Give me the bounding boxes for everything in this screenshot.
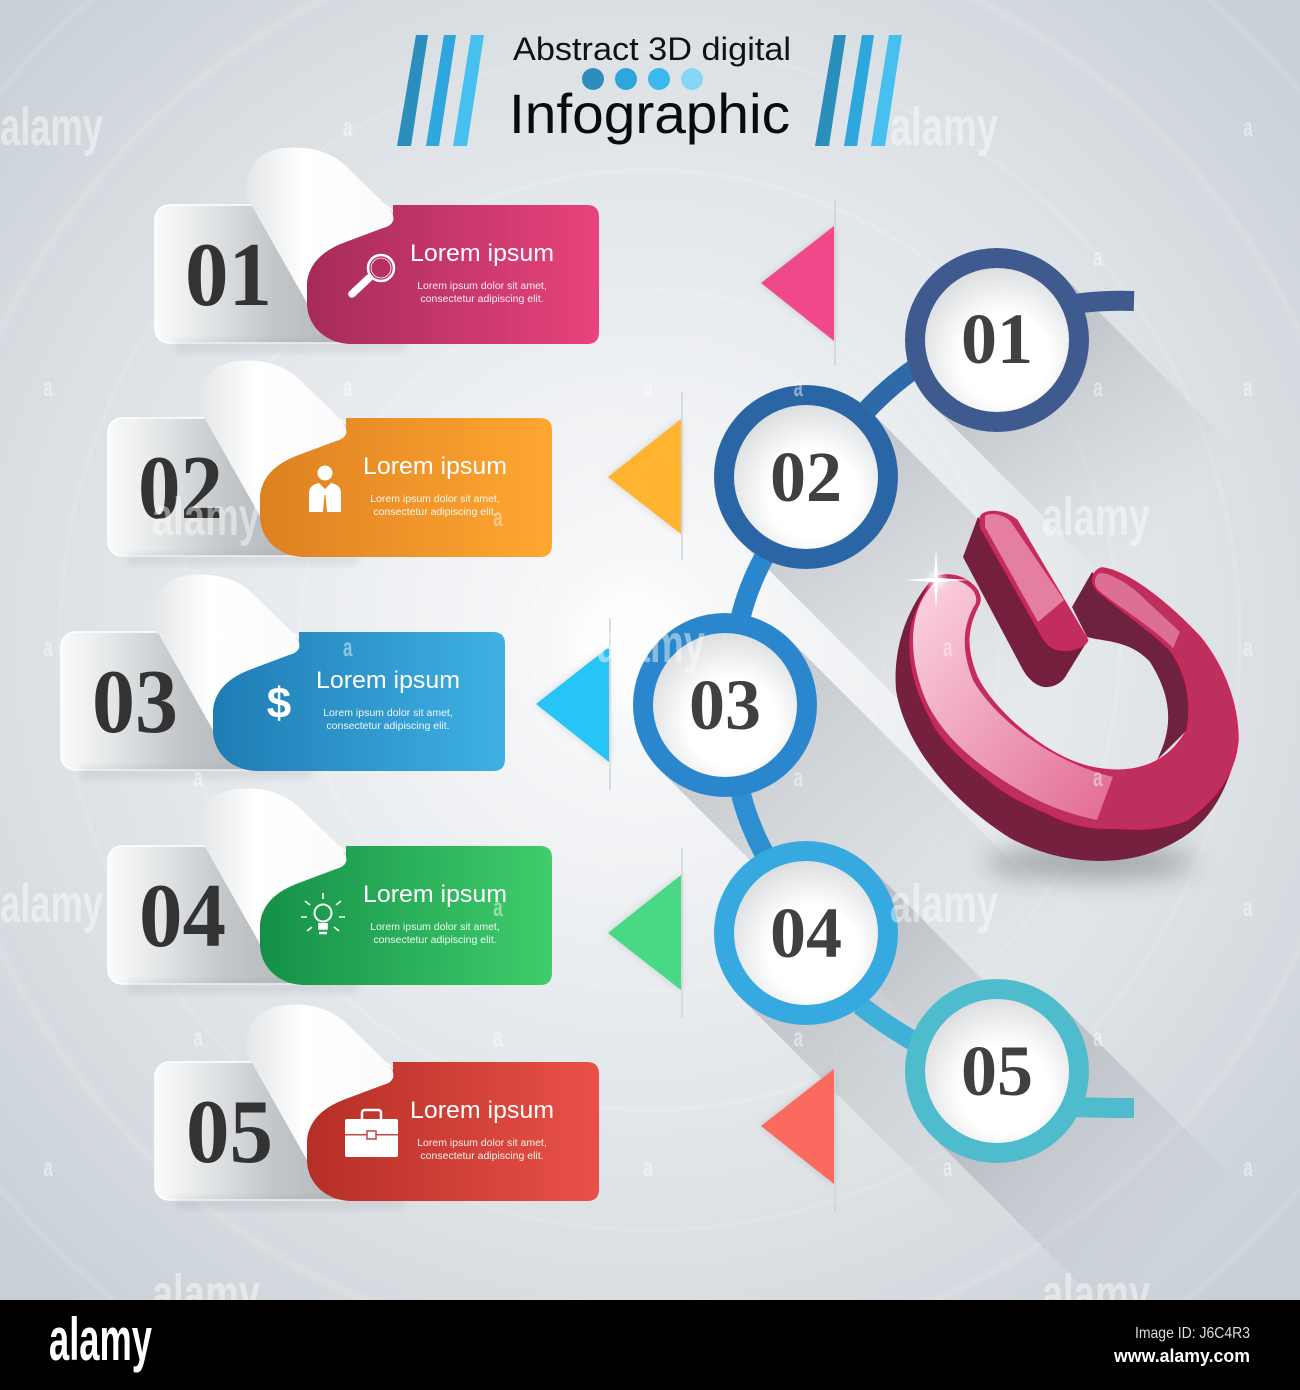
circle 02	[714, 385, 898, 569]
panel: card 01: Lorem ipsum dolor sit amet,	[417, 280, 547, 292]
panel: card 01: Lorem ipsum	[410, 240, 554, 267]
icon: light bulb	[301, 893, 345, 933]
footer bar	[0, 1300, 1300, 1390]
panel: card 02: Lorem ipsum	[363, 453, 507, 480]
watermarks: alamy	[890, 874, 998, 934]
panel: card 02: consectetur adipiscing elit.	[373, 506, 497, 518]
watermarks: a	[643, 372, 653, 402]
panel: card 01: consectetur adipiscing elit.	[420, 293, 544, 305]
left stripes icon	[397, 35, 484, 146]
panel: card 02: Lorem ipsum dolor sit amet,	[370, 493, 500, 505]
icon: briefcase	[345, 1110, 398, 1157]
watermarks: a	[194, 1022, 204, 1052]
watermarks: a	[343, 112, 353, 142]
footer image id: Image ID: J6C4R3	[1135, 1325, 1250, 1342]
watermarks: a	[43, 632, 53, 662]
icon: businessman	[309, 466, 341, 512]
panel: card 01	[155, 148, 599, 352]
watermarks: a	[943, 1152, 953, 1182]
arrow: orange triangle	[608, 392, 682, 560]
watermarks: a	[794, 762, 804, 792]
watermarks: a	[43, 1152, 53, 1182]
watermarks: a	[794, 1022, 804, 1052]
title	[397, 31, 902, 146]
arrow: red triangle	[761, 1042, 835, 1212]
footer logo: alamy	[49, 1306, 152, 1373]
panel: card 04: 04	[139, 865, 226, 966]
panel: card 03: Lorem ipsum	[316, 667, 460, 694]
circle 01	[905, 248, 1089, 432]
watermarks: alamy	[0, 874, 103, 934]
sparkle	[904, 548, 970, 610]
long shadows of the circles	[660, 275, 1246, 1320]
watermarks: a	[1093, 1022, 1103, 1052]
arrow: pink triangle	[761, 200, 835, 366]
arrow: cyan triangle	[536, 618, 610, 790]
watermarks: a	[43, 372, 53, 402]
watermarks: a	[1243, 892, 1253, 922]
watermarks: a	[1243, 1152, 1253, 1182]
panel: card 04: Lorem ipsum	[363, 881, 507, 908]
title dots	[582, 68, 703, 90]
stick top face	[980, 511, 1088, 651]
watermarks: alamy	[1042, 1264, 1150, 1324]
stick side wall	[963, 517, 1088, 687]
footer url: www.alamy.com	[1113, 1346, 1250, 1366]
title line one: Abstract 3D digital	[513, 31, 791, 67]
stick highlight	[985, 514, 1064, 622]
circle 04	[714, 841, 898, 1025]
watermarks: alamy	[152, 1264, 260, 1324]
watermarks: a	[343, 632, 353, 662]
circle 05	[905, 979, 1089, 1163]
circle 01: 01	[961, 299, 1033, 379]
circle 03	[633, 613, 817, 797]
watermarks: alamy	[1042, 487, 1150, 547]
watermarks: alamy	[597, 614, 705, 674]
ring top face	[910, 568, 1238, 829]
panel: card 05: Lorem ipsum	[410, 1097, 554, 1124]
connector lines	[740, 301, 1134, 1108]
icon: magnifier	[352, 255, 394, 294]
watermarks: a	[493, 892, 503, 922]
ring highlight right	[1095, 573, 1180, 648]
right stripes icon	[815, 35, 902, 146]
panel: card 04: Lorem ipsum dolor sit amet,	[370, 921, 500, 933]
watermarks: a	[643, 1152, 653, 1182]
watermarks: a	[794, 372, 804, 402]
circle 04: 04	[770, 893, 842, 973]
panel: card 02: 02	[138, 437, 223, 538]
watermarks: alamy	[152, 487, 260, 547]
circle 02: 02	[770, 437, 842, 517]
watermarks: alamy	[0, 97, 103, 157]
watermarks: a	[1243, 372, 1253, 402]
circle 03: 03	[689, 665, 761, 745]
ring side wall	[896, 578, 1238, 861]
panel: card 01: 01	[185, 224, 272, 325]
watermarks: a	[1093, 372, 1103, 402]
arrow: green triangle	[608, 848, 682, 1018]
watermarks: a	[1093, 242, 1103, 272]
watermarks: a	[1243, 112, 1253, 142]
watermarks: a	[343, 372, 353, 402]
watermarks: a	[1093, 762, 1103, 792]
watermarks: a	[493, 1022, 503, 1052]
icon: dollar: $	[267, 679, 291, 728]
panel: card 04	[108, 789, 552, 993]
watermarks: a	[493, 502, 503, 532]
ring highlight left	[913, 580, 1113, 820]
panel: card 04: consectetur adipiscing elit.	[373, 934, 497, 946]
panel: card 05: 05	[186, 1081, 273, 1182]
panel: card 05	[155, 1005, 599, 1209]
watermarks: alamy	[890, 97, 998, 157]
panel: card 05: consectetur adipiscing elit.	[420, 1150, 544, 1162]
panel: card 03: Lorem ipsum dolor sit amet,	[323, 707, 453, 719]
icon: 3D power symbol	[896, 511, 1238, 880]
title line two: Infographic	[509, 82, 790, 145]
panel: card 03	[61, 575, 505, 779]
panel: card 05: Lorem ipsum dolor sit amet,	[417, 1137, 547, 1149]
watermarks: a	[1243, 632, 1253, 662]
inner wall	[1072, 572, 1190, 760]
panel: card 02	[108, 361, 552, 565]
circle 05: 05	[961, 1031, 1033, 1111]
panel: card 03: 03	[92, 651, 178, 752]
watermarks: a	[194, 762, 204, 792]
watermarks: a	[943, 632, 953, 662]
panel: card 03: consectetur adipiscing elit.	[326, 720, 450, 732]
